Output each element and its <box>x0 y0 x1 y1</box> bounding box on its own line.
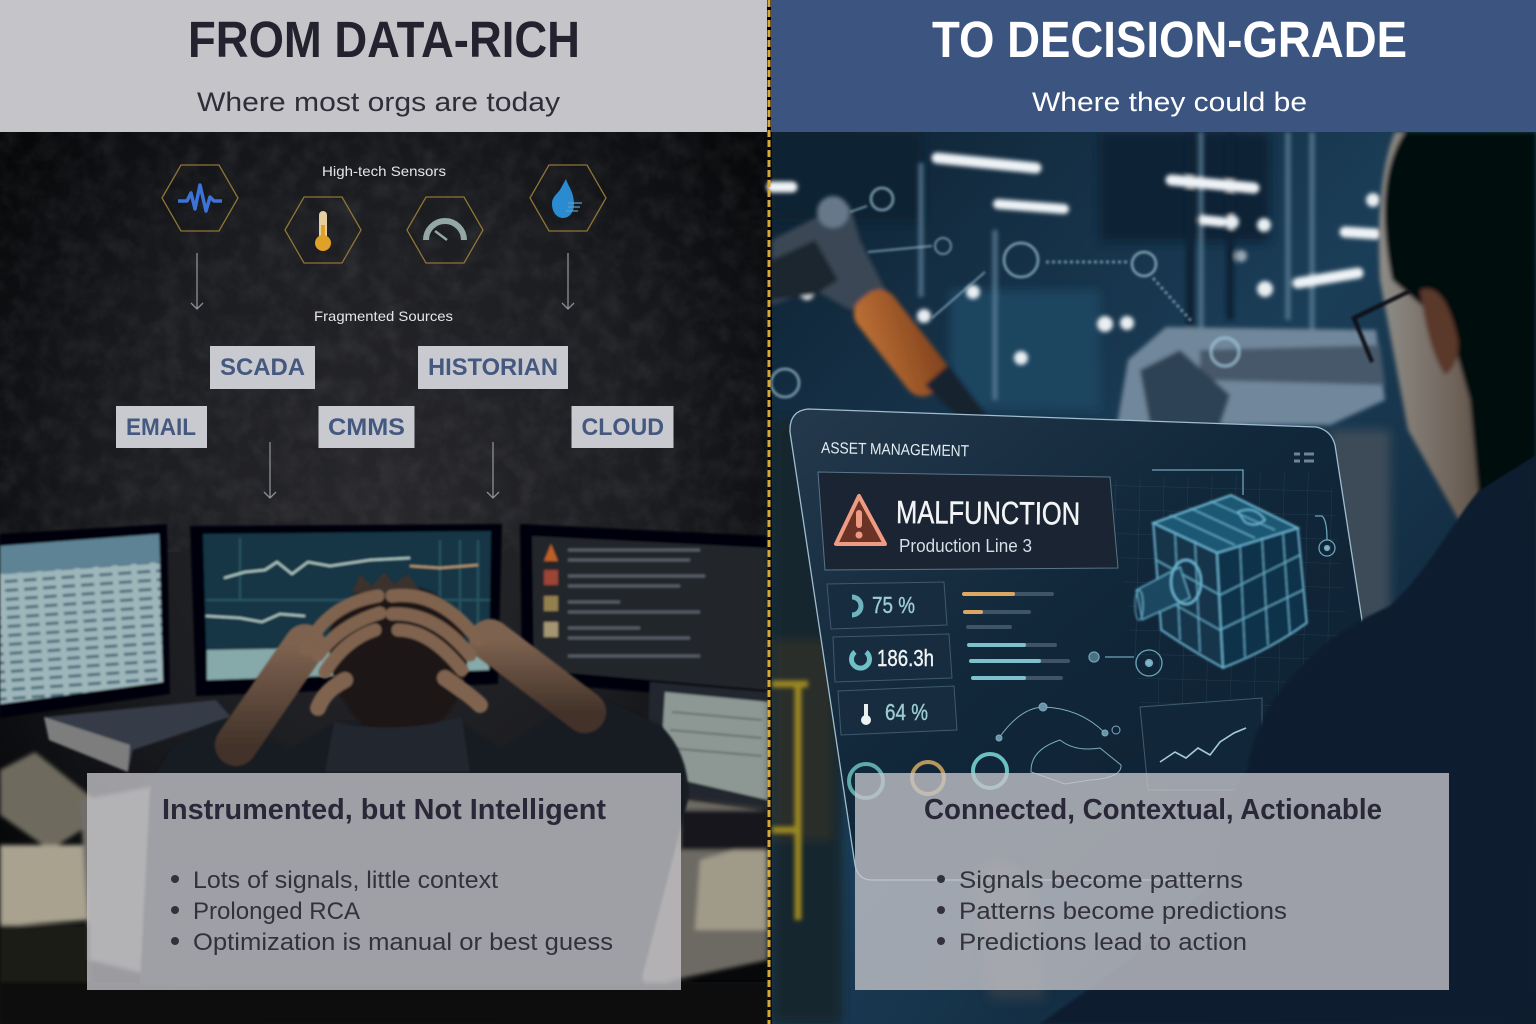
ring gauges <box>849 754 1007 798</box>
head <box>329 585 467 737</box>
source tag: cmms: CMMS <box>328 414 405 441</box>
source tag: email: EMAIL <box>126 414 196 441</box>
subtitle: right: Where they could be <box>1032 87 1307 117</box>
icon: menu <box>1294 454 1314 461</box>
icon: water drop hexagon <box>530 165 606 231</box>
arrow: sensor to sources left <box>191 253 203 309</box>
source tag: cloud <box>572 406 674 448</box>
railing: yellow posts <box>772 684 808 920</box>
trend chart <box>1140 698 1262 790</box>
jacket <box>1040 455 1536 1024</box>
panel heading left: Instrumented, but Not Intelligent <box>162 794 606 826</box>
icon: thermometer hexagon <box>285 197 361 263</box>
source tag: cloud: CLOUD <box>582 414 664 441</box>
panel: connected, contextual, actionable <box>855 773 1449 990</box>
hand <box>975 860 1045 1000</box>
source tag: email <box>116 406 207 448</box>
icon: warning triangle <box>836 496 885 544</box>
bullet list right: Patterns become predictions <box>959 898 1287 925</box>
forearms <box>236 645 305 745</box>
bullet list right <box>937 867 1287 956</box>
source tag: cmms <box>318 406 414 448</box>
collar <box>325 717 470 772</box>
icon: pressure gauge hexagon <box>407 197 483 263</box>
bullet list right: Predictions lead to action <box>959 929 1247 956</box>
source tag: historian: HISTORIAN <box>428 354 558 381</box>
stat card: 186.3h: 186.3h <box>877 645 934 671</box>
source tag: scada <box>210 346 315 389</box>
panel: instrumented, but not intelligent <box>87 773 681 990</box>
alert subtitle: Production Line 3 <box>899 536 1032 556</box>
bullet list right: Signals become patterns <box>959 867 1243 894</box>
alert title: MALFUNCTION <box>896 494 1080 532</box>
stat card: 75% <box>827 582 947 629</box>
stat card: 64% <box>838 686 957 735</box>
alert card <box>818 472 1118 570</box>
arrow: sources to desk right <box>487 442 499 498</box>
label: asset management: ASSET MANAGEMENT <box>821 440 969 460</box>
bullet list left: Optimization is manual or best guess <box>193 929 613 956</box>
arrow: sources to desk left <box>264 442 276 498</box>
source tag: scada: SCADA <box>220 354 305 381</box>
source tag: historian <box>418 346 568 389</box>
subtitle: left: Where most orgs are today <box>197 87 561 117</box>
panel heading right: Connected, Contextual, Actionable <box>924 794 1382 826</box>
dashboard arcs <box>996 703 1121 784</box>
status bars <box>964 594 1068 678</box>
left photo: stressed operator at monitors <box>0 132 768 1024</box>
bullet list left: Prolonged RCA <box>193 898 360 925</box>
engineer: head, glasses and jacket <box>975 132 1536 1024</box>
arrow: sensor to sources right <box>562 253 574 309</box>
body under the panel <box>140 693 688 985</box>
label: fragmented sources: Fragmented Sources <box>314 308 453 324</box>
left header band <box>0 0 767 132</box>
stat card: 64%: 64 % <box>885 699 928 725</box>
title: from data-rich: FROM DATA-RICH <box>188 11 580 68</box>
fingers <box>306 595 480 708</box>
bullet list left: Lots of signals, little context <box>193 867 498 894</box>
stat card: 186.3h <box>833 634 952 682</box>
right photo: engineer viewing asset dashboard <box>771 132 1536 1024</box>
3d wireframe: machine part <box>1135 495 1307 668</box>
connector nodes <box>1089 470 1335 676</box>
tablet: asset management dashboard <box>790 409 1362 880</box>
bullet list left <box>171 867 613 956</box>
icon: vibration sensor hexagon <box>162 165 238 231</box>
stat card: 75%: 75 % <box>872 592 915 618</box>
glasses <box>1354 290 1412 362</box>
right header band <box>771 0 1536 132</box>
label: high-tech sensors: High-tech Sensors <box>322 163 446 179</box>
title: to decision-grade: TO DECISION-GRADE <box>932 11 1407 68</box>
center divider: gold dashed <box>768 0 770 1024</box>
